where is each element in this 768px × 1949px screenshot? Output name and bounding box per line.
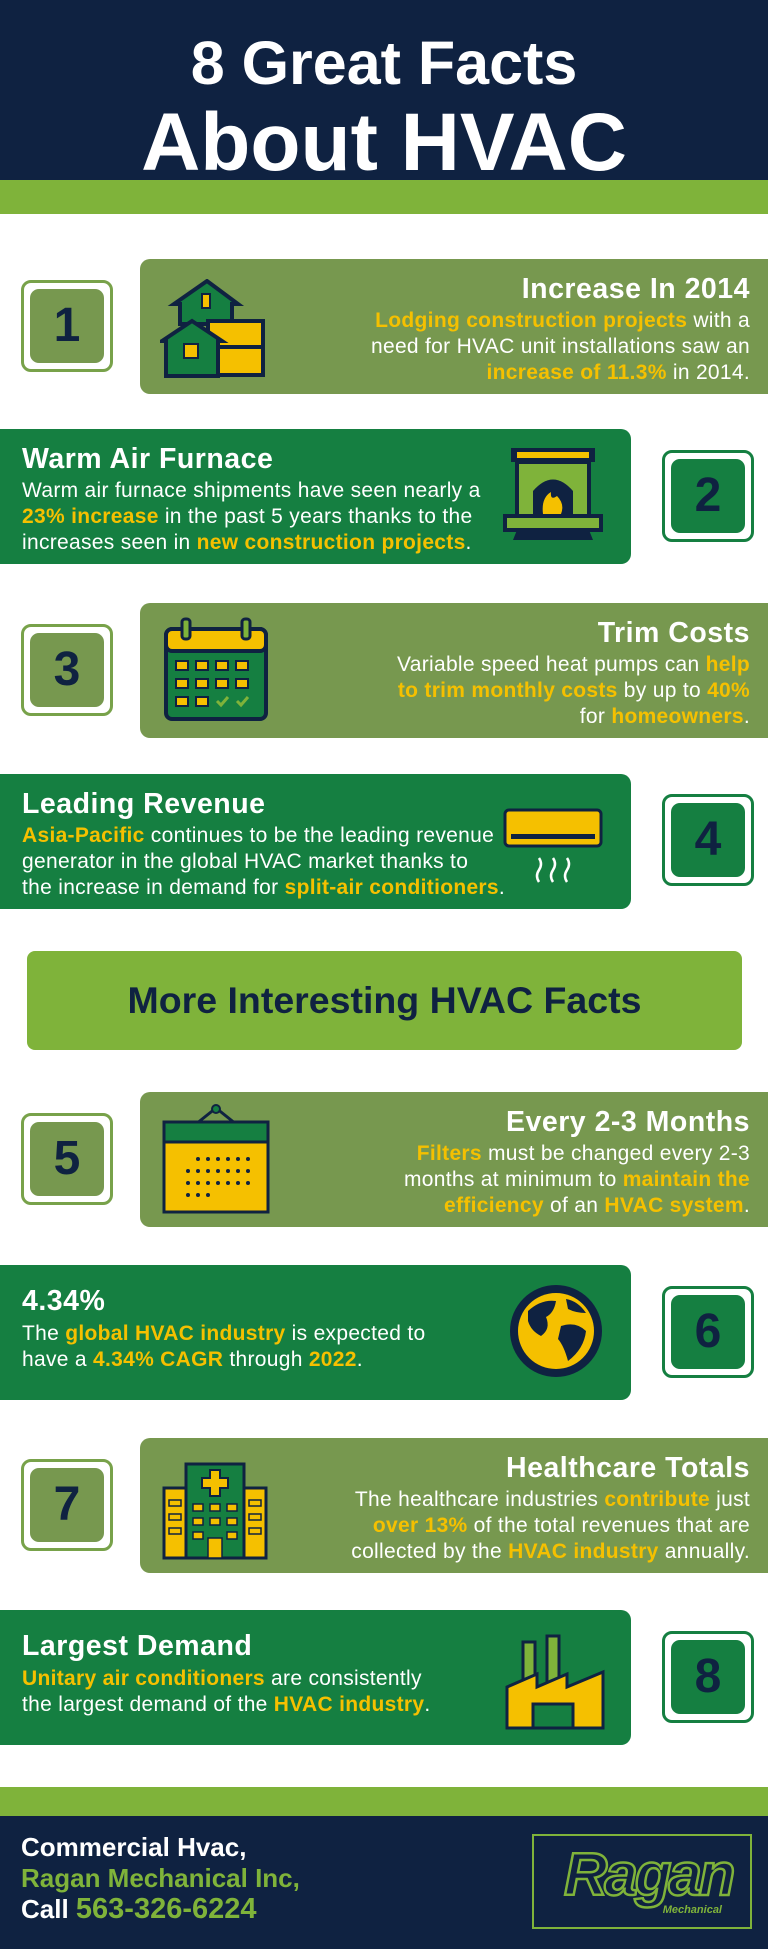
heading 6: 4.34% — [22, 1285, 105, 1317]
number 1: 1 — [54, 299, 80, 352]
text 6: have a 4.34% CAGR through 2022. — [22, 1348, 363, 1371]
card 2 — [0, 429, 631, 564]
text 3: for homeowners. — [580, 705, 750, 728]
title: 8 Great Facts — [191, 29, 577, 97]
card 1 — [140, 259, 768, 394]
logo: Mechanical — [663, 1904, 722, 1916]
green band bottom — [0, 1787, 768, 1816]
heading 1: Increase In 2014 — [522, 273, 750, 305]
number 7: 7 — [54, 1478, 80, 1531]
number 2: 2 — [695, 469, 721, 522]
logo — [532, 1834, 752, 1929]
text 7 — [351, 1488, 750, 1563]
icon: wall calendar — [162, 1104, 270, 1214]
heading 8: Largest Demand — [22, 1630, 252, 1662]
number 4: 4 — [695, 813, 721, 866]
icon: calendar — [164, 618, 268, 721]
text 3: Variable speed heat pumps can help — [397, 653, 750, 676]
footer text — [21, 1832, 300, 1925]
text 4: the increase in demand for split-air conditioners. — [22, 876, 505, 899]
text 2 — [22, 479, 481, 554]
header — [0, 0, 768, 180]
text 8: Unitary air conditioners are consistently — [22, 1667, 422, 1690]
text 5: Filters must be changed every 2-3 — [417, 1142, 750, 1165]
number 4 — [662, 794, 754, 886]
text 1: increase of 11.3% in 2014. — [487, 361, 750, 384]
heading 7: Healthcare Totals — [506, 1452, 750, 1484]
banner: more interesting facts — [27, 951, 742, 1050]
number 7 — [21, 1459, 113, 1551]
number 6: 6 — [695, 1305, 721, 1358]
text 3 — [397, 653, 750, 728]
text 2: 23% increase in the past 5 years thanks to the — [22, 505, 472, 528]
number 1 — [21, 280, 113, 372]
card 8 — [0, 1610, 631, 1745]
text 8 — [22, 1667, 430, 1716]
icon: houses — [160, 279, 265, 378]
card 3 — [140, 603, 768, 738]
text 5: months at minimum to maintain the — [404, 1168, 750, 1191]
icon: factory — [506, 1634, 604, 1730]
text 4: Asia-Pacific continues to be the leading revenue — [22, 824, 494, 847]
number 3: 3 — [54, 643, 80, 696]
banner: more interesting facts: More Interesting HVAC Facts — [128, 979, 641, 1021]
text 2: Warm air furnace shipments have seen nearly a — [22, 479, 481, 502]
footer text: Commercial Hvac, — [21, 1832, 246, 1862]
logo: Ragan — [564, 1841, 732, 1908]
text 7: over 13% of the total revenues that are — [373, 1514, 750, 1537]
heading 5: Every 2-3 Months — [506, 1106, 750, 1138]
card 7 — [140, 1438, 768, 1573]
card 5 — [140, 1092, 768, 1227]
card 4 — [0, 774, 631, 909]
icon: globe — [510, 1285, 602, 1377]
footer text: Call 563-326-6224 — [21, 1893, 257, 1925]
number 3 — [21, 624, 113, 716]
icon: hospital — [162, 1462, 268, 1560]
text 2: increases seen in new construction projects. — [22, 531, 472, 554]
text 7: collected by the HVAC industry annually. — [351, 1540, 750, 1563]
text 5 — [404, 1142, 750, 1217]
footer text: Ragan Mechanical Inc, — [21, 1863, 300, 1893]
icon: air conditioner — [504, 808, 602, 883]
number 6 — [662, 1286, 754, 1378]
text 6 — [22, 1322, 425, 1371]
text 8: the largest demand of the HVAC industry. — [22, 1693, 430, 1716]
heading 3: Trim Costs — [598, 617, 750, 649]
number 5: 5 — [54, 1132, 80, 1185]
footer — [0, 1816, 768, 1949]
number 8: 8 — [695, 1650, 721, 1703]
card 6 — [0, 1265, 631, 1400]
text 1 — [371, 309, 750, 384]
number 2 — [662, 450, 754, 542]
text 1: need for HVAC unit installations saw an — [371, 335, 750, 358]
icon: fireplace — [503, 448, 603, 540]
green band top — [0, 180, 768, 214]
number 5 — [21, 1113, 113, 1205]
heading 4: Leading Revenue — [22, 788, 265, 820]
text 7: The healthcare industries contribute just — [355, 1488, 750, 1511]
number 8 — [662, 1631, 754, 1723]
text 3: to trim monthly costs by up to 40% — [398, 679, 750, 702]
text 4 — [22, 824, 505, 899]
text 5: efficiency of an HVAC system. — [444, 1194, 750, 1217]
text 4: generator in the global HVAC market thanks to — [22, 850, 468, 873]
heading 2: Warm Air Furnace — [22, 443, 273, 475]
text 1: Lodging construction projects with a — [375, 309, 750, 332]
text 6: The global HVAC industry is expected to — [22, 1322, 425, 1345]
title — [141, 29, 627, 188]
title: About HVAC — [141, 97, 627, 188]
